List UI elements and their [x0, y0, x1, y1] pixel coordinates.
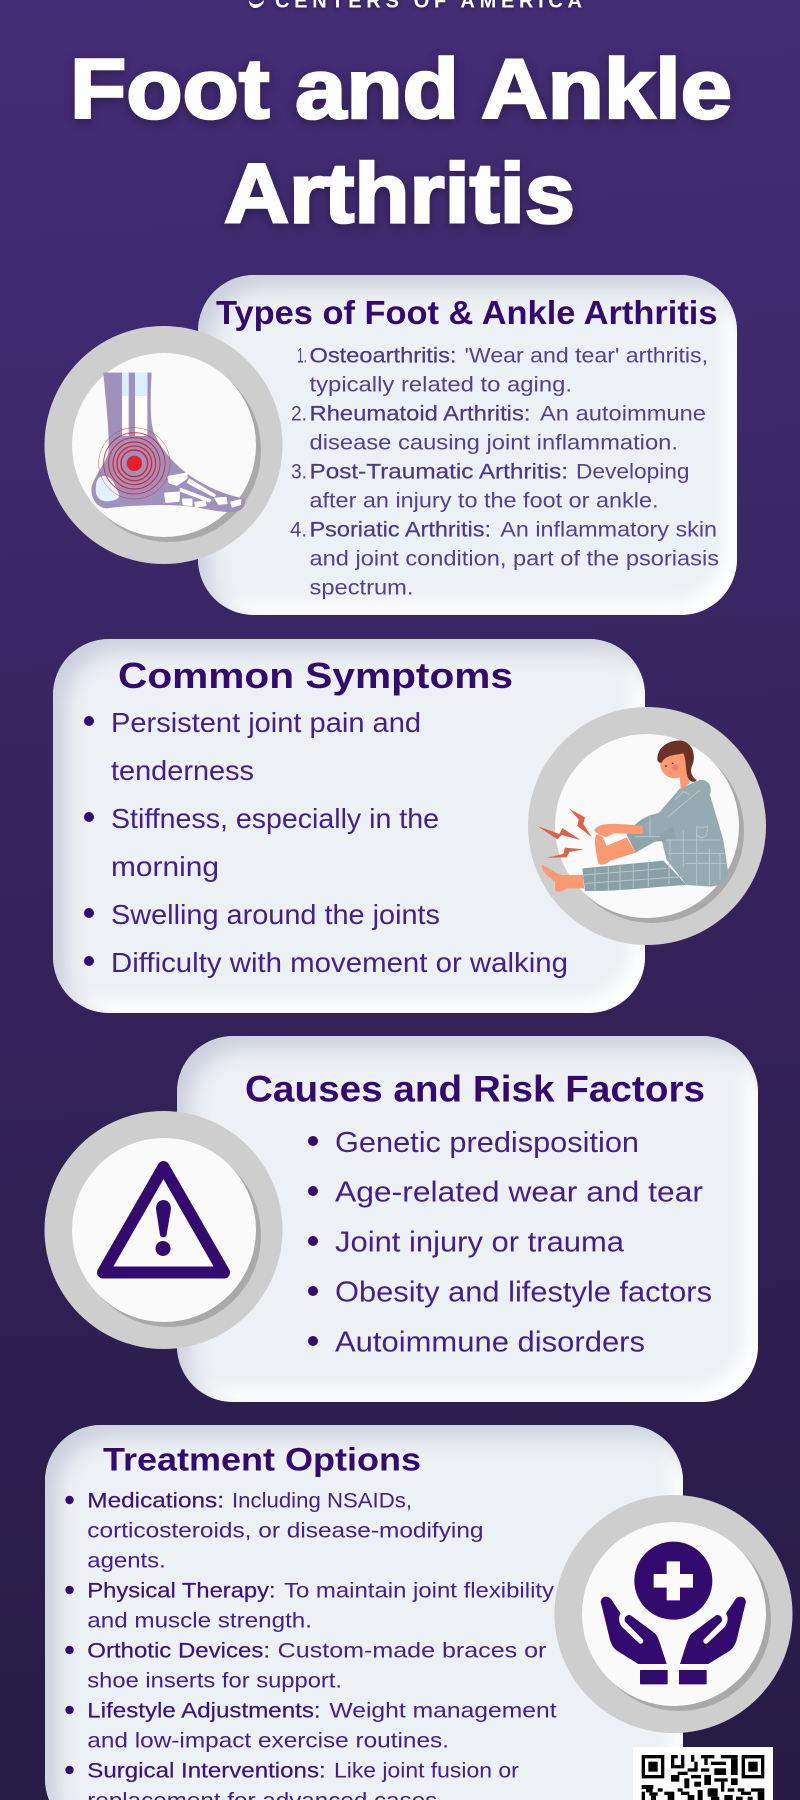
bullet list of treatments: agents.	[87, 1549, 166, 1572]
numbered list of arthritis types: An autoimmune	[540, 403, 706, 426]
icon: foot with pain rings	[44, 326, 282, 564]
numbered list of arthritis types	[290, 345, 719, 600]
bullet list of causes: Joint injury or trauma	[335, 1226, 625, 1258]
bullet list of treatments: Orthotic Devices:	[87, 1639, 270, 1662]
bullet list of causes: Genetic predisposition	[335, 1127, 639, 1159]
bullet list of treatments: and muscle strength.	[87, 1609, 312, 1632]
numbered list of arthritis types: 1.	[297, 345, 307, 368]
numbered list of arthritis types: 2.	[291, 403, 307, 426]
panel: types of foot and ankle arthritis	[44, 275, 737, 615]
bullet list of treatments: Like joint fusion or	[334, 1759, 519, 1782]
bullet list of treatments: and low-impact exercise routines.	[87, 1729, 449, 1752]
bullet list of causes: Age-related wear and tear	[335, 1176, 703, 1208]
bullet list of causes	[308, 1127, 712, 1358]
bullet list of treatments: Medications:	[87, 1489, 224, 1512]
bullet list of symptoms	[84, 707, 568, 978]
panel: causes and risk factors	[44, 1036, 758, 1402]
heading: treatment: Treatment Options	[103, 1442, 421, 1478]
bullet list of treatments: To maintain joint flexibility	[284, 1579, 555, 1602]
bullet list of treatments: Custom-made braces or	[278, 1639, 546, 1662]
numbered list of arthritis types: 4.	[290, 519, 307, 542]
heading: causes: Causes and Risk Factors	[245, 1068, 705, 1110]
bullet list of causes: Autoimmune disorders	[335, 1326, 645, 1358]
heading: symptoms: Common Symptoms	[118, 655, 513, 696]
icon: woman holding painful foot	[528, 707, 766, 945]
bullet list of symptoms: Stiffness, especially in the	[111, 803, 439, 834]
numbered list of arthritis types: disease causing joint inflammation.	[310, 432, 678, 455]
bullet list of treatments: shoe inserts for support.	[87, 1669, 342, 1692]
title: Foot and Ankle	[70, 42, 732, 136]
numbered list of arthritis types: Osteoarthritis:	[310, 345, 456, 368]
numbered list of arthritis types: 3.	[291, 461, 307, 484]
icon: hands holding medical cross	[554, 1495, 792, 1733]
numbered list of arthritis types: Psoriatic Arthritis:	[310, 519, 491, 542]
bullet list of causes: Obesity and lifestyle factors	[335, 1276, 712, 1308]
bullet list of treatments: Lifestyle Adjustments:	[87, 1699, 321, 1722]
numbered list of arthritis types: Rheumatoid Arthritis:	[310, 403, 530, 426]
numbered list of arthritis types: spectrum.	[310, 577, 414, 600]
numbered list of arthritis types: after an injury to the foot or ankle.	[310, 490, 658, 513]
bullet list of treatments: Physical Therapy:	[87, 1579, 276, 1602]
panel: treatment options	[45, 1425, 792, 1800]
bullet list of symptoms: tenderness	[111, 755, 254, 786]
numbered list of arthritis types: Developing	[576, 461, 690, 484]
title: Arthritis	[224, 146, 575, 240]
bullet list of treatments	[65, 1489, 557, 1800]
numbered list of arthritis types: typically related to aging.	[310, 374, 572, 397]
bullet list of treatments: Weight management	[329, 1699, 557, 1722]
heading: types: Types of Foot & Ankle Arthritis	[216, 294, 718, 331]
bullet list of treatments: Including NSAIDs,	[232, 1489, 412, 1512]
header: logo and title	[70, 0, 733, 240]
title	[70, 42, 732, 240]
bullet list of symptoms: Difficulty with movement or walking	[111, 947, 568, 978]
qr code	[633, 1747, 773, 1800]
bullet list of treatments: Surgical Interventions:	[87, 1759, 326, 1782]
numbered list of arthritis types: and joint condition, part of the psoriasis	[310, 548, 719, 571]
panel: common symptoms	[53, 639, 766, 1013]
bullet list of symptoms: Persistent joint pain and	[111, 707, 421, 738]
bullet list of treatments: corticosteroids, or disease-modifying	[87, 1519, 484, 1542]
numbered list of arthritis types: An inflammatory skin	[500, 519, 717, 542]
bullet list of symptoms: Swelling around the joints	[111, 899, 440, 930]
icon: warning triangle	[44, 1111, 282, 1349]
numbered list of arthritis types: 'Wear and tear' arthritis,	[464, 345, 708, 368]
bullet list of symptoms: morning	[111, 851, 219, 882]
numbered list of arthritis types: Post-Traumatic Arthritis:	[310, 461, 568, 484]
